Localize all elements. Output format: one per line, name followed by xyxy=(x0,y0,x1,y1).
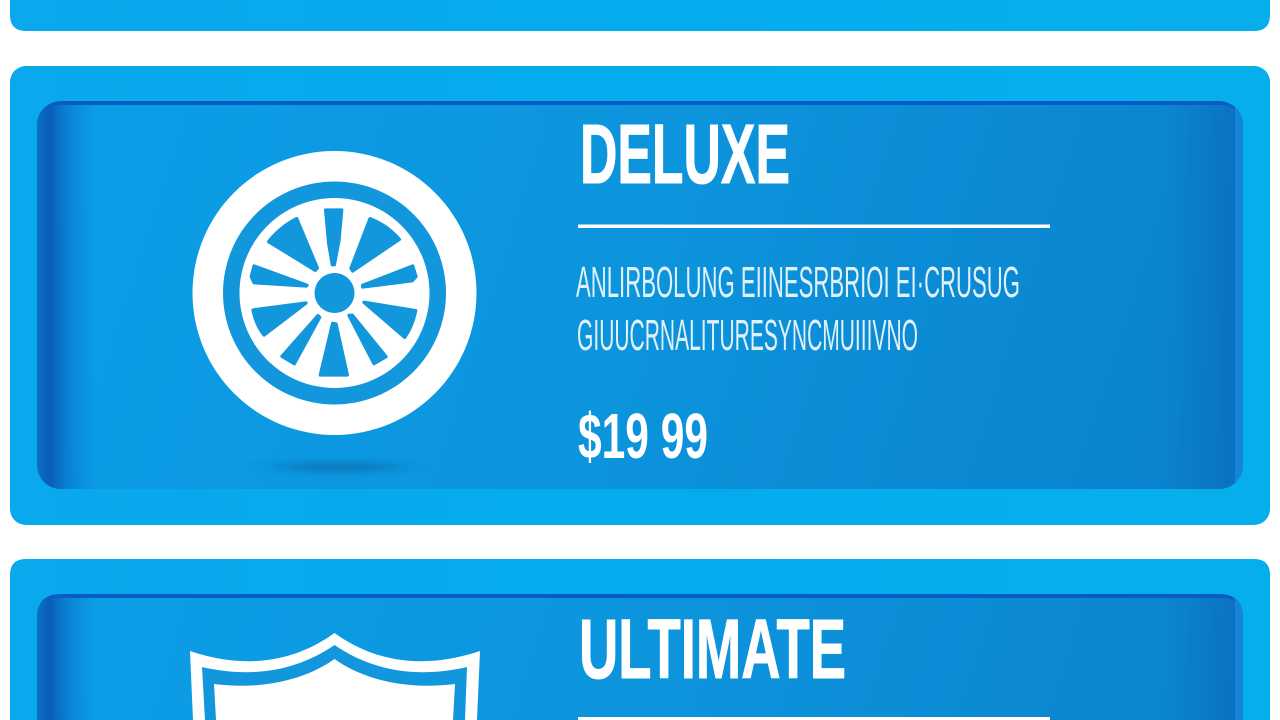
divider line xyxy=(578,717,1050,720)
icon: wheel xyxy=(192,151,476,435)
divider line xyxy=(578,224,1050,228)
price: $19 99 xyxy=(578,400,708,472)
heading: deluxe: DELUXE xyxy=(580,107,790,201)
ultimate panel frame xyxy=(10,559,1270,720)
heading: ultimate: ULTIMATE xyxy=(579,602,846,696)
ultimate panel inner area xyxy=(37,594,1243,720)
wheel shadow xyxy=(276,462,400,472)
deluxe panel inner area xyxy=(37,101,1243,489)
icon: shield xyxy=(190,633,480,720)
panel: ultimate xyxy=(10,559,1270,720)
panel: deluxe xyxy=(10,66,1270,525)
description text: GIUUCRNALITURESYNCMUIIIVNO xyxy=(577,311,918,360)
description text xyxy=(576,258,1020,360)
panel: previous plan (cropped at top) xyxy=(10,0,1270,31)
deluxe panel frame xyxy=(10,66,1270,525)
